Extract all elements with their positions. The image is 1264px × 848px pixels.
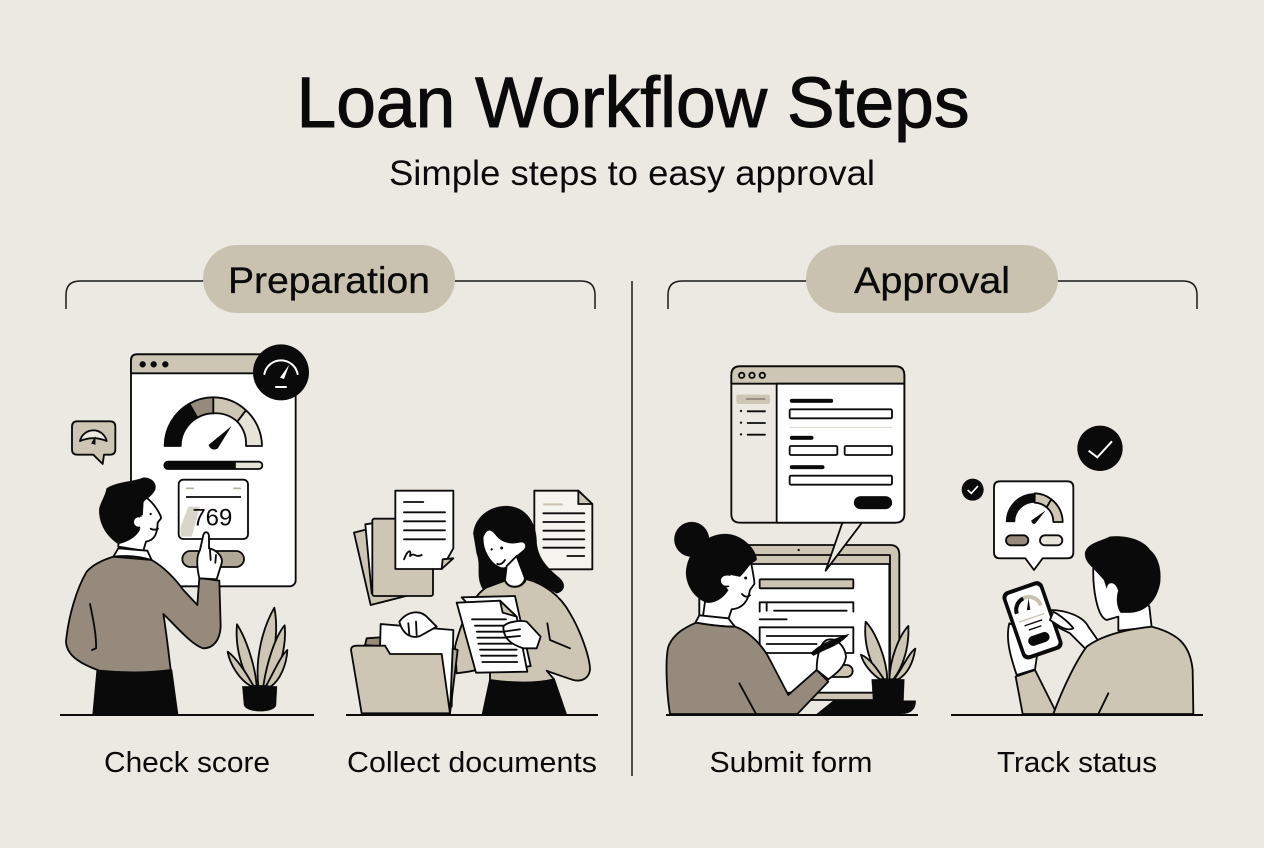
- ground line: [60, 714, 314, 716]
- gauge chart: [165, 397, 262, 449]
- icon: black gauge badge: [253, 344, 309, 400]
- section header: Preparation: [66, 245, 595, 313]
- illustration: collect documents: [351, 491, 592, 714]
- title: Loan Workflow Steps: [296, 64, 970, 143]
- section header: Approval: [668, 245, 1197, 313]
- signed document: [395, 491, 453, 569]
- score card: 769: 769: [192, 505, 232, 532]
- person pointing at score: [66, 478, 222, 714]
- person signing form: [667, 522, 849, 714]
- speech bubble with gauge: [72, 421, 115, 464]
- person using phone: [1008, 536, 1193, 714]
- score browser window: [131, 354, 296, 586]
- subtitle: Simple steps to easy approval: [389, 154, 875, 193]
- ground line: [951, 714, 1203, 716]
- phone with gauge: [1001, 579, 1064, 661]
- illustration: check score: [66, 344, 309, 714]
- laptop: [699, 545, 916, 714]
- section header: Preparation: Preparation: [228, 260, 430, 301]
- label: collect documents: Collect documents: [347, 747, 597, 779]
- section header: Approval: Approval: [854, 260, 1010, 301]
- person holding documents: [455, 506, 590, 714]
- icon: small check badge: [962, 479, 984, 501]
- label: check score: Check score: [104, 747, 270, 779]
- potted plant: [228, 608, 287, 711]
- divider between sections: [631, 281, 633, 776]
- fingers on phone: [1050, 612, 1073, 629]
- floating document: [534, 491, 592, 569]
- progress bar: [164, 462, 262, 469]
- ground line: [666, 714, 918, 716]
- illustration: submit form: [667, 366, 916, 714]
- score card: 769: [179, 480, 248, 539]
- gauge callout: [994, 481, 1073, 570]
- potted plant: [861, 622, 915, 705]
- label: track status: Track status: [997, 747, 1157, 779]
- form browser window: [731, 366, 904, 523]
- score button: [182, 551, 244, 567]
- illustration: track status: [962, 426, 1193, 714]
- stacked papers: [354, 519, 433, 605]
- callout tail: [826, 520, 864, 571]
- ground line: [346, 714, 598, 716]
- folder with papers: [351, 612, 458, 713]
- icon: large check badge: [1077, 426, 1123, 471]
- label: submit form: Submit form: [710, 747, 872, 779]
